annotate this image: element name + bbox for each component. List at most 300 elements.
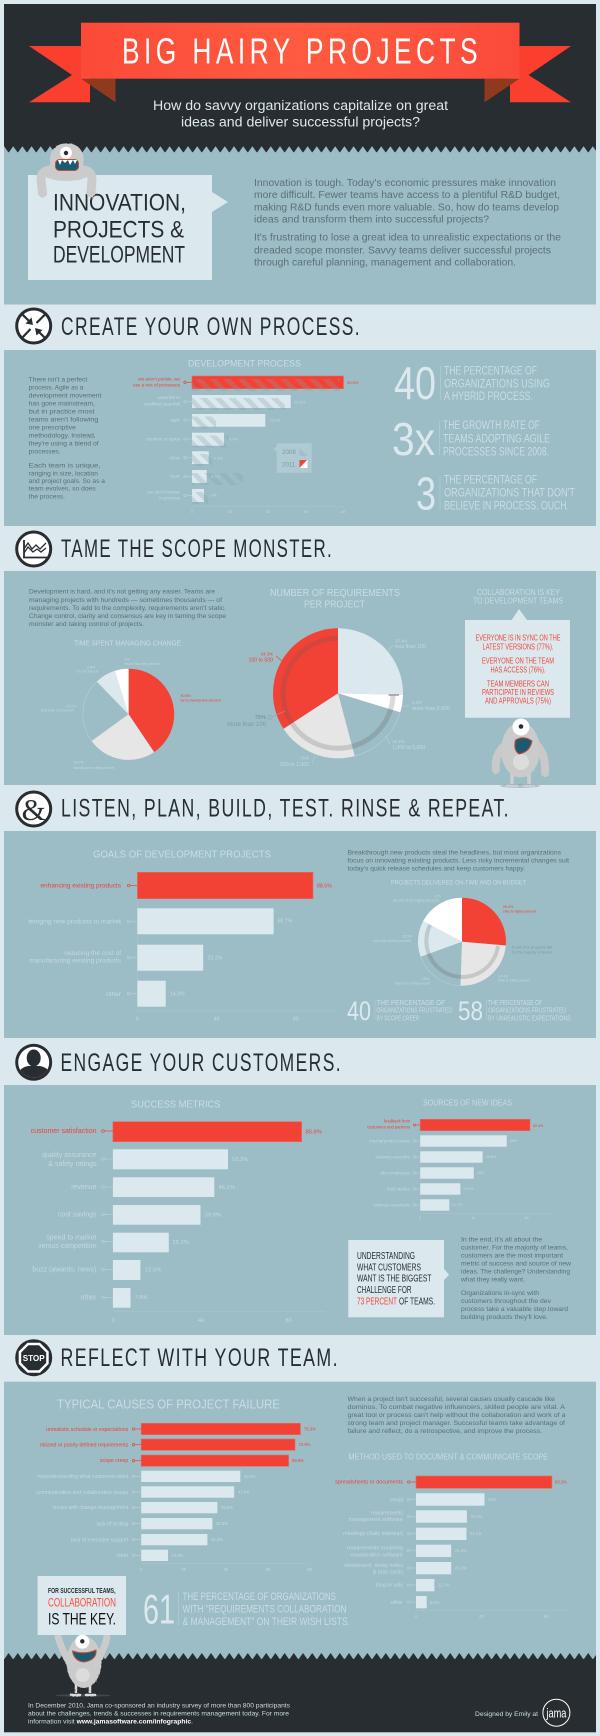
bar: hybrid bbox=[133, 376, 359, 391]
subtitle: How do savvy organizations capitalize on great bbox=[153, 98, 448, 113]
bar: RUP: 3.7% bbox=[211, 474, 221, 479]
bar: waterfall: waterfall or bbox=[158, 395, 180, 400]
pie labels: 26.4% bbox=[503, 905, 514, 909]
stat: 3 percent: 3 bbox=[416, 467, 436, 519]
stat: 3x growth: 3x bbox=[392, 413, 435, 465]
text block: failure: When a project isn't successful, several causes usually cascade like bbox=[348, 1396, 555, 1403]
callout: innovation, projects and development bbox=[28, 175, 228, 280]
chart: development process: DEVELOPMENT PROCESS bbox=[188, 359, 301, 370]
bar: don't believe: 3% bbox=[211, 492, 217, 498]
text block: process: the process. bbox=[29, 494, 65, 501]
intro text: more difficult. Fewer teams have access to a plentiful R&D budget, bbox=[254, 190, 560, 201]
bar: reducing the cost bbox=[29, 945, 223, 971]
bar: unrealistic schedule: 75.3% bbox=[304, 1426, 316, 1432]
callout: understanding customers bbox=[348, 1240, 449, 1317]
footer text: In December 2010, Jama co-sponsored an industry survey of more than 800 participants bbox=[28, 1703, 291, 1710]
text block: process: but in practice most bbox=[29, 409, 95, 416]
stat: 40 percent bbox=[394, 357, 550, 409]
ribbon banner bbox=[29, 23, 571, 102]
bar: iterative or spiral: iterative or spiral bbox=[146, 437, 180, 442]
bar: reducing the cost: 33.2% bbox=[208, 956, 223, 962]
bar: visionary executive bbox=[375, 1151, 497, 1163]
pie labels: greater than eighty percent bbox=[393, 899, 439, 903]
pie labels: 34.3% bbox=[261, 652, 273, 657]
stat: 40 percent scope creep: ORGANIZATIONS FRUSTRATED bbox=[376, 1008, 452, 1015]
bar: requirements management software: management software bbox=[349, 1517, 403, 1523]
text block: process: they're using a blend of bbox=[29, 440, 99, 447]
pie labels: less than ten percent bbox=[41, 709, 74, 713]
callout: collaboration is key: HAS ACCESS (76%). bbox=[490, 665, 546, 674]
axis labels: 0 bbox=[191, 509, 194, 514]
chart: projects delivered on-time and on-budget bbox=[373, 879, 552, 986]
text block: breakthrough: Breakthrough new products steal the headlines, but most organizations bbox=[348, 849, 562, 856]
bar: meetings: 31.1% bbox=[470, 1531, 482, 1536]
text block: process: methodology. Instead, bbox=[29, 432, 96, 439]
text block: process: ranging in size, location bbox=[29, 470, 99, 477]
pie labels bbox=[227, 639, 450, 768]
bar: revenue: revenue bbox=[71, 1184, 97, 1191]
stat: 61 percent: WITH "REQUIREMENTS COLLABORATION bbox=[182, 1604, 347, 1616]
pie labels: twenty-five to fifty percent bbox=[74, 766, 114, 770]
pie labels: 17% bbox=[434, 894, 442, 898]
panel: engage your customers bbox=[4, 1085, 596, 1335]
bar: other: 12.8% bbox=[172, 1553, 184, 1558]
bar: waterfall bbox=[144, 395, 306, 410]
pie labels: 20% bbox=[300, 756, 309, 761]
text block: customer: building products they'll love. bbox=[461, 1314, 548, 1321]
bar: reducing the cost: manufacturing existing products bbox=[29, 958, 122, 965]
bar: cost savings bbox=[58, 1205, 221, 1225]
designer credit: Designed by Emily at bbox=[475, 1711, 538, 1718]
callout: understanding customers: OF TEAMS. bbox=[399, 1296, 435, 1307]
axis labels bbox=[419, 1216, 529, 1220]
pie labels: ten to twenty-five percent bbox=[180, 699, 221, 703]
chart: typical causes of project failure: TYPICAL CAUSES OF PROJECT FAILURE bbox=[57, 1398, 280, 1412]
callout: collaboration is key: TO DEVELOPMENT TEAMS bbox=[473, 597, 563, 606]
icon: arrows converging bbox=[17, 309, 51, 343]
bar: external consultants: 21.7% bbox=[452, 1203, 463, 1207]
bar: feedback from customers: 82.4% bbox=[533, 1124, 544, 1128]
text block: process bbox=[29, 377, 105, 501]
stat: 40 percent: A HYBRID PROCESS. bbox=[444, 391, 533, 403]
sign: collaboration is the key: COLLABORATION bbox=[48, 1596, 116, 1610]
section heading: tame the scope monster bbox=[17, 532, 333, 566]
text block: customer: process take a valuable step toward bbox=[461, 1306, 568, 1313]
text block: scope: Change control, clarity and consensus are key in taming the scope bbox=[29, 613, 226, 620]
bar: agile bbox=[170, 414, 281, 428]
bar: missed requirements: missed or poorly defined requirements bbox=[40, 1443, 129, 1449]
bar: meetings: meetings (daily standup) bbox=[343, 1531, 403, 1537]
legend: 2008 bbox=[282, 449, 296, 456]
bar: buzz: buzz (awards, news) bbox=[32, 1267, 96, 1274]
monster standing bbox=[496, 718, 545, 788]
bar: spreadsheets or documents: spreadsheets or documents bbox=[335, 1479, 403, 1485]
stat: 40 percent scope creep: 40 bbox=[347, 996, 371, 1026]
bar: internal product teams: internal product teams bbox=[369, 1138, 410, 1143]
text block: customer: In the end, it's all about the bbox=[461, 1236, 542, 1243]
text block: process: has gone mainstream, bbox=[29, 401, 95, 408]
stat: 58 percent unrealistic expectations: BY UNREALISTIC EXPECTATIONS. bbox=[488, 1016, 572, 1023]
footer text: information visit www.jamasoftware.com/infographic. bbox=[28, 1719, 193, 1726]
section heading: reflect with your team: REFLECT WITH YOUR TEAM. bbox=[60, 1344, 339, 1372]
stat: 58 percent unrealistic expectations: ORGANIZATIONS FRUSTRATED bbox=[488, 1008, 566, 1015]
text block: process: team evolves, so does bbox=[29, 486, 96, 493]
icon: ampersand: & bbox=[22, 792, 46, 827]
axis labels bbox=[111, 1318, 292, 1324]
section heading: tame the scope monster: TAME THE SCOPE MONSTER. bbox=[61, 535, 333, 563]
bar: meetings bbox=[343, 1528, 482, 1540]
bar: customer satisfaction: 85.8% bbox=[306, 1130, 322, 1136]
text block: process: There isn't a perfect bbox=[29, 377, 88, 384]
pie labels: 25.4% bbox=[395, 639, 408, 644]
text block: scope: Development is hard, and it's not getting any easier. Teams are bbox=[29, 589, 215, 596]
bar: iterative or spiral: 8.4% bbox=[229, 436, 239, 442]
bar: agile: 19.2% bbox=[269, 418, 281, 422]
pie labels bbox=[373, 894, 552, 985]
bar: don't believe bbox=[147, 489, 217, 504]
footer panel bbox=[4, 1653, 596, 1732]
text block: process: process. Agile as a bbox=[29, 385, 84, 392]
bar: other: other bbox=[170, 456, 180, 460]
bar: missed requirements bbox=[40, 1439, 311, 1450]
bar: don't believe: we don't believe bbox=[147, 490, 180, 494]
monster holding sign bbox=[55, 1635, 111, 1697]
callout: innovation, projects and development: PROJECTS & bbox=[53, 216, 184, 243]
callout: understanding customers: WANT IS THE BIGGEST bbox=[357, 1274, 432, 1285]
bar: requirements management software: 31.4% bbox=[470, 1514, 483, 1519]
bar: blog or wiki: blog or wiki bbox=[375, 1583, 403, 1589]
stat: 61 percent: 61 bbox=[143, 1585, 175, 1632]
pie labels: 15.5% bbox=[402, 935, 413, 939]
axis labels: 30 bbox=[303, 509, 308, 514]
bar: lack of testing bbox=[96, 1518, 228, 1529]
bar: internal product teams: 65% bbox=[510, 1139, 518, 1143]
text block: process: processes. bbox=[29, 448, 61, 455]
text block: scope: requirements. To add to the complexity, requirements aren't static. bbox=[29, 605, 226, 612]
callout: understanding customers: 73 PERCENT bbox=[357, 1296, 397, 1307]
bar: other: 14.3% bbox=[170, 992, 185, 998]
bar: communication: communication and collaboration issues bbox=[36, 1490, 129, 1496]
pie labels: less than 100 bbox=[395, 644, 426, 650]
bar: external consultants: external consultants bbox=[374, 1203, 410, 1208]
bar: requirements management software: requirements bbox=[371, 1510, 403, 1516]
axis labels: 0 bbox=[140, 1567, 143, 1572]
icon: stop sign: STOP bbox=[23, 1353, 45, 1363]
bar: email: email bbox=[390, 1497, 403, 1503]
axis labels: 20 bbox=[266, 509, 271, 514]
section heading: engage your customers: ENGAGE YOUR CUSTOMERS. bbox=[60, 1049, 342, 1077]
callout: collaboration is key: AND APPROVALS (75%) bbox=[485, 697, 551, 706]
bar: lack of executive support: 31.2% bbox=[211, 1537, 223, 1542]
callout: collaboration is key: COLLABORATION IS KEY bbox=[477, 588, 561, 597]
bar: internal product teams bbox=[369, 1135, 518, 1147]
sign: collaboration is the key: FOR SUCCESSFUL TEAMS, bbox=[48, 1586, 116, 1595]
axis labels: 10 bbox=[228, 509, 233, 514]
chart: sources of new ideas bbox=[367, 1098, 552, 1220]
text block: process: and project goals. So as a bbox=[29, 478, 105, 485]
bar: requirements management software bbox=[349, 1510, 483, 1523]
pie labels: more than 5,000 bbox=[412, 706, 450, 712]
stat: 3x growth: PROCESSES SINCE 2008. bbox=[443, 446, 549, 458]
chart: development process bbox=[133, 359, 359, 514]
stat: 61 percent bbox=[143, 1585, 350, 1632]
axis labels: 0 bbox=[111, 1318, 115, 1324]
chart: number of requirements per project: NUMBER OF REQUIREMENTS bbox=[270, 588, 400, 599]
bar: enhancing existing products bbox=[40, 872, 332, 899]
bar: speed to market: speed to market bbox=[46, 1234, 97, 1241]
pie labels: 18% bbox=[422, 977, 430, 981]
bar: misunderstanding bbox=[37, 1471, 256, 1482]
text block: failure: great tool or process can't help without the collaboration and work of a bbox=[348, 1412, 566, 1419]
bar: misunderstanding: 46.9% bbox=[244, 1474, 256, 1479]
axis labels bbox=[136, 1017, 299, 1023]
stat: 61 percent: & MANAGEMENT" ON THEIR WISH LISTS. bbox=[182, 1616, 350, 1628]
chart: success metrics: SUCCESS METRICS bbox=[131, 1099, 220, 1111]
bar: quality assurance: quality assurance bbox=[42, 1152, 97, 1159]
bar: communication bbox=[36, 1486, 250, 1498]
bar: communication: 43.9% bbox=[238, 1490, 250, 1494]
bar: other employees: other employees bbox=[380, 1170, 410, 1175]
icon: person bbox=[15, 1044, 52, 1081]
title: BIG HAIRY PROJECTS bbox=[122, 30, 482, 71]
bar: external consultants bbox=[374, 1199, 463, 1211]
bar: enhancing existing products: 88.5% bbox=[317, 884, 332, 890]
text block: process: Each team is unique, bbox=[29, 462, 101, 469]
bar: email: 42% bbox=[488, 1497, 497, 1502]
bar: other bbox=[170, 451, 223, 466]
pie labels: it's not my job bbox=[76, 670, 98, 674]
text block: process: teams aren't following bbox=[29, 417, 99, 424]
text block: breakthrough: today's quick release schedules and keep customers happy. bbox=[348, 866, 525, 873]
bar: whiteboard: 21.6% bbox=[455, 1566, 467, 1570]
chart: time spent managing change: TIME SPENT MANAGING CHANGE bbox=[74, 639, 181, 648]
bar: don't believe: in process bbox=[159, 496, 181, 500]
text block: customer: Organizations in-sync with bbox=[461, 1290, 539, 1297]
chart: success metrics bbox=[31, 1099, 325, 1324]
pie labels: more than 100 bbox=[227, 722, 267, 728]
axis labels: 40 bbox=[341, 509, 346, 514]
bar: other: other bbox=[390, 1600, 403, 1606]
text block: failure: strong team and project manager. Successful teams take advantage of bbox=[348, 1420, 565, 1427]
bar: lack of testing: 33.6% bbox=[216, 1521, 228, 1526]
monster peeking over callout bbox=[41, 144, 92, 193]
panel: tame the scope monster bbox=[4, 571, 596, 788]
pie labels: less than twenty percent bbox=[373, 939, 411, 943]
stat: 40 percent: ORGANIZATIONS USING bbox=[444, 378, 550, 390]
bar: unrealistic schedule bbox=[46, 1423, 316, 1435]
bar: speed to market: 25.3% bbox=[172, 1240, 189, 1246]
text block: customer: what they really want. bbox=[460, 1276, 525, 1283]
pie labels: for the majority of teams bbox=[512, 950, 552, 954]
callout: innovation, projects and development: DEVELOPMENT bbox=[53, 242, 185, 269]
text block: customer: customers are the most important bbox=[461, 1252, 563, 1259]
bar: revenue bbox=[71, 1177, 235, 1197]
text block: process: development movement bbox=[29, 393, 102, 400]
bar: customer satisfaction: customer satisfaction bbox=[31, 1128, 97, 1135]
chart: method used to document and communicate scope bbox=[335, 1452, 568, 1619]
bar: missed requirements: 72.8% bbox=[298, 1442, 311, 1447]
pie labels: more than fifty percent bbox=[124, 662, 160, 666]
bar: enhancing existing products: enhancing existing products bbox=[40, 882, 122, 889]
bar: R&D studies bbox=[387, 1183, 474, 1195]
stat: 58 percent unrealistic expectations: THE PERCENTAGE OF bbox=[488, 1000, 542, 1007]
bar: feedback from customers: customers and partners bbox=[367, 1124, 410, 1129]
callout: understanding customers: UNDERSTANDING bbox=[357, 1251, 415, 1262]
bar: cost savings: cost savings bbox=[58, 1211, 97, 1218]
bar: scope creep: 69.6% bbox=[292, 1458, 304, 1463]
bar: visionary executive: 46.8% bbox=[486, 1155, 497, 1159]
pie labels: 75% bbox=[255, 715, 266, 721]
panel: intro bbox=[4, 144, 596, 304]
axis labels: 40 bbox=[214, 1017, 220, 1023]
bar: speed to market bbox=[38, 1233, 189, 1252]
bar: other bbox=[106, 981, 185, 1007]
text block: process: one prescriptive bbox=[29, 425, 76, 432]
pie labels: sixty to eighty percent bbox=[503, 909, 536, 913]
bar: other bbox=[81, 1288, 148, 1308]
stat: 3x growth: TEAMS ADOPTING AGILE bbox=[443, 433, 550, 445]
chart: method used to document and communicate scope: METHOD USED TO DOCUMENT & COMMUNICATE SCOPE bbox=[348, 1452, 548, 1462]
axis labels: 40 bbox=[198, 1318, 204, 1324]
section heading: engage your customers bbox=[15, 1044, 342, 1081]
icon: line chart bbox=[17, 532, 51, 566]
axis labels: 0 bbox=[419, 1216, 421, 1220]
bar: other employees: 40% bbox=[477, 1171, 485, 1175]
bar: bringing new products bbox=[28, 908, 293, 934]
intro text: It's frustrating to lose a great idea to unrealistic expectations or the bbox=[254, 233, 561, 244]
header panel bbox=[4, 4, 596, 152]
callout: collaboration is key: TEAM MEMBERS CAN bbox=[487, 679, 549, 688]
intro text bbox=[254, 178, 561, 268]
axis labels bbox=[140, 1567, 313, 1572]
callout: collaboration is key: EVERYONE IS IN SYNC ON THE bbox=[476, 634, 560, 643]
bar: lack of executive support bbox=[71, 1534, 223, 1545]
chart: number of requirements per project bbox=[227, 588, 450, 768]
bar: lack of executive support: lack of executive support bbox=[71, 1538, 129, 1544]
axis labels bbox=[191, 509, 346, 514]
bar: cost savings: 39.9% bbox=[204, 1212, 221, 1218]
bar: spreadsheets or documents bbox=[335, 1476, 567, 1488]
chart: number of requirements per project: PER PROJECT bbox=[304, 600, 365, 611]
bar: waterfall: 25.9% bbox=[294, 400, 306, 404]
pie labels: forty to sixty percent bbox=[498, 979, 530, 983]
section heading: listen, plan, build, test bbox=[17, 792, 510, 827]
bar: quality assurance: 52.3% bbox=[232, 1157, 248, 1163]
pie labels: 40.6% bbox=[180, 694, 191, 698]
bar: other: 6.6% bbox=[430, 1600, 440, 1605]
stat: 3x growth bbox=[392, 413, 550, 465]
callout: collaboration is key bbox=[465, 588, 570, 718]
bar: change management: issues with change management bbox=[53, 1505, 129, 1511]
bar: change management bbox=[53, 1502, 233, 1513]
subtitle: ideas and deliver successful projects? bbox=[181, 114, 420, 129]
bar: hybrid: we aren't purists, we bbox=[138, 376, 180, 381]
intro text: making R&D funds even more valuable. So, how do teams develop bbox=[254, 202, 559, 213]
text block: failure: failure and reflect, do a retrospective, and improve the process. bbox=[348, 1428, 542, 1435]
bar: requirements modeling bbox=[347, 1545, 467, 1558]
subtitle bbox=[153, 98, 448, 129]
text block: scope bbox=[29, 589, 226, 628]
stat: 40 percent: 40 bbox=[394, 357, 436, 409]
bar: lack of testing: lack of testing bbox=[96, 1522, 128, 1528]
bar: requirements modeling: 21.6% bbox=[455, 1548, 467, 1553]
bar: customer satisfaction bbox=[31, 1122, 322, 1142]
text block: customer bbox=[460, 1236, 571, 1321]
pie labels: 5% bbox=[124, 658, 130, 662]
bar: requirements modeling: visualization software bbox=[351, 1552, 403, 1558]
bar: requirements modeling: requirements modeling bbox=[347, 1546, 403, 1552]
axis labels: 40 bbox=[223, 1567, 229, 1572]
stat: 58 percent unrealistic expectations bbox=[458, 996, 572, 1026]
text block: customer: ideas. The challenge? Understanding bbox=[461, 1268, 570, 1275]
chart: goals of development projects: GOALS OF DEVELOPMENT PROJECTS bbox=[93, 850, 271, 861]
axis labels: 0 bbox=[415, 1614, 418, 1619]
callout: collaboration is key: EVERYONE ON THE TEAM bbox=[482, 656, 554, 665]
footer text: about the challenges, trends & successes in requirements management today. For more bbox=[28, 1711, 289, 1718]
bar: other: 7.8% bbox=[134, 1295, 148, 1301]
bar: agile: agile bbox=[170, 418, 180, 423]
intro text: Innovation is tough. Today's economic pressures make innovation bbox=[254, 178, 556, 189]
stat: 61 percent: THE PERCENTAGE OF ORGANIZATIONS bbox=[182, 1591, 336, 1603]
bar: other: other bbox=[116, 1553, 128, 1559]
bar: R&D studies: R&D studies bbox=[387, 1186, 410, 1191]
chart: sources of new ideas: SOURCES OF NEW IDEAS bbox=[423, 1098, 512, 1108]
intro text: ideas and transform them into successful projects? bbox=[254, 215, 489, 226]
chart: projects delivered on-time and on-budget: PROJECTS DELIVERED ON-TIME AND ON-BUDGET bbox=[391, 879, 526, 886]
text block: scope: monster and taking control of projects. bbox=[29, 621, 144, 628]
bar: whiteboard: whiteboard, sticky notes bbox=[343, 1563, 403, 1569]
bar: feedback from customers bbox=[367, 1119, 544, 1131]
bar: visionary executive: visionary executive bbox=[375, 1154, 411, 1159]
pie labels: 500 to 1,000 bbox=[280, 762, 309, 768]
section heading: reflect with your team bbox=[15, 1339, 339, 1376]
bar: email bbox=[390, 1493, 497, 1506]
bar: RUP: RUP bbox=[170, 474, 180, 479]
text block: customer: metric of success and source of new bbox=[461, 1260, 571, 1267]
bar: reducing the cost: reducing the cost of bbox=[64, 950, 121, 957]
bar: other bbox=[390, 1596, 440, 1608]
axis labels: 40 bbox=[471, 1216, 475, 1220]
bar: unrealistic schedule: unrealistic schedule or expectations bbox=[46, 1427, 129, 1433]
chart: goals of development projects bbox=[28, 850, 335, 1023]
pie labels: 5 out of 8 projects fail bbox=[512, 945, 552, 949]
pie labels: 22.2% bbox=[66, 705, 77, 709]
callout: collaboration is key: PARTICIPATE IN REVIEWS bbox=[482, 688, 554, 697]
section heading: create your own process: CREATE YOUR OWN PROCESS. bbox=[61, 313, 361, 341]
text block: scope: managing projects with hundreds — sometimes thousands — of bbox=[29, 597, 222, 604]
pie labels: 23.7% bbox=[74, 760, 84, 764]
bar: revenue: 46.1% bbox=[218, 1185, 235, 1191]
bar: spreadsheets or documents: 83.2% bbox=[555, 1480, 567, 1484]
bar: speed to market: versus competition bbox=[38, 1243, 97, 1250]
callout: innovation, projects and development: INNOVATION, bbox=[53, 190, 186, 217]
axis labels: 0 bbox=[136, 1017, 139, 1023]
callout: understanding customers: CHALLENGE FOR bbox=[357, 1285, 412, 1296]
bar: quality assurance: & safety ratings bbox=[48, 1161, 97, 1168]
icon: stop sign bbox=[15, 1339, 52, 1376]
callout: understanding customers: WHAT CUSTOMERS bbox=[357, 1262, 421, 1273]
bar: whiteboard: & task cards bbox=[373, 1570, 403, 1576]
axis labels: 40 bbox=[479, 1614, 484, 1619]
bar: blog or wiki: 11.3% bbox=[438, 1582, 450, 1588]
footer text bbox=[28, 1703, 291, 1726]
stat: 40 percent scope creep: THE PERCENTAGE OF bbox=[376, 1000, 445, 1007]
bar: feedback from customers: feedback from bbox=[384, 1119, 411, 1124]
bar: scope creep: scope creep bbox=[100, 1458, 128, 1464]
stat: 3 percent: THE PERCENTAGE OF bbox=[444, 474, 537, 486]
pie labels: 24.4% bbox=[498, 974, 509, 978]
jama logo bbox=[543, 1699, 570, 1726]
